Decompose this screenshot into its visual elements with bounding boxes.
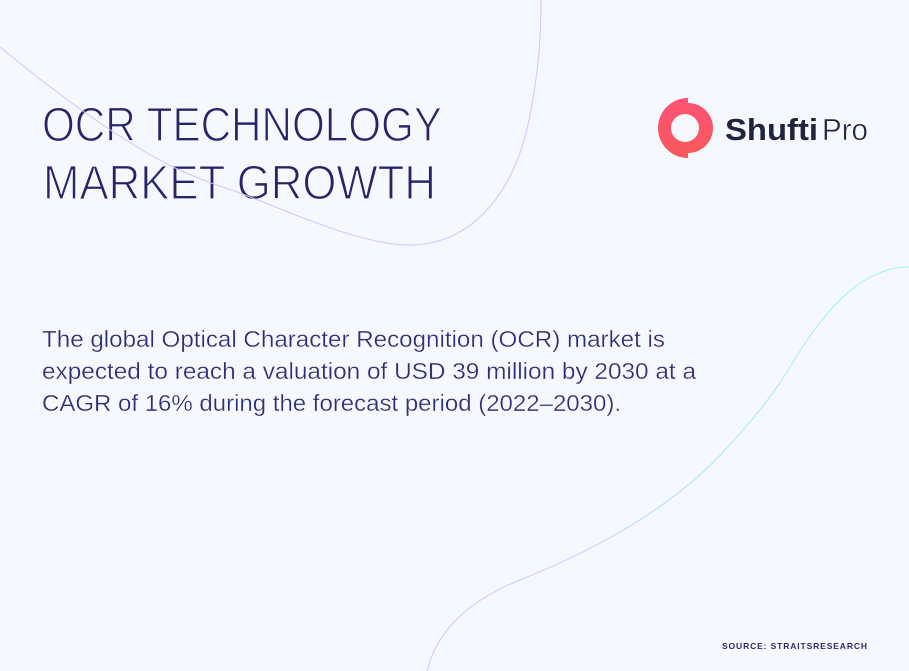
- body text: The global Optical Character Recognition (OCR) market is: [42, 326, 665, 352]
- curve: lavender: [0, 0, 541, 245]
- title: MARKET GROWTH: [43, 157, 436, 210]
- body text: CAGR of 16% during the forecast period (2022–2030).: [42, 390, 621, 416]
- logo: [658, 98, 868, 158]
- icon: ring: [658, 98, 713, 158]
- title: [42, 99, 442, 210]
- source note: SOURCE: STRAITSRESEARCH: [722, 641, 867, 651]
- logo wordmark: Pro: Pro: [822, 112, 868, 147]
- logo wordmark: Shufti: Shufti: [725, 112, 818, 147]
- body text: [42, 326, 697, 416]
- curve: teal: [427, 267, 909, 671]
- body text: expected to reach a valuation of USD 39 million by 2030 at a: [42, 358, 697, 384]
- title: OCR TECHNOLOGY: [42, 99, 442, 152]
